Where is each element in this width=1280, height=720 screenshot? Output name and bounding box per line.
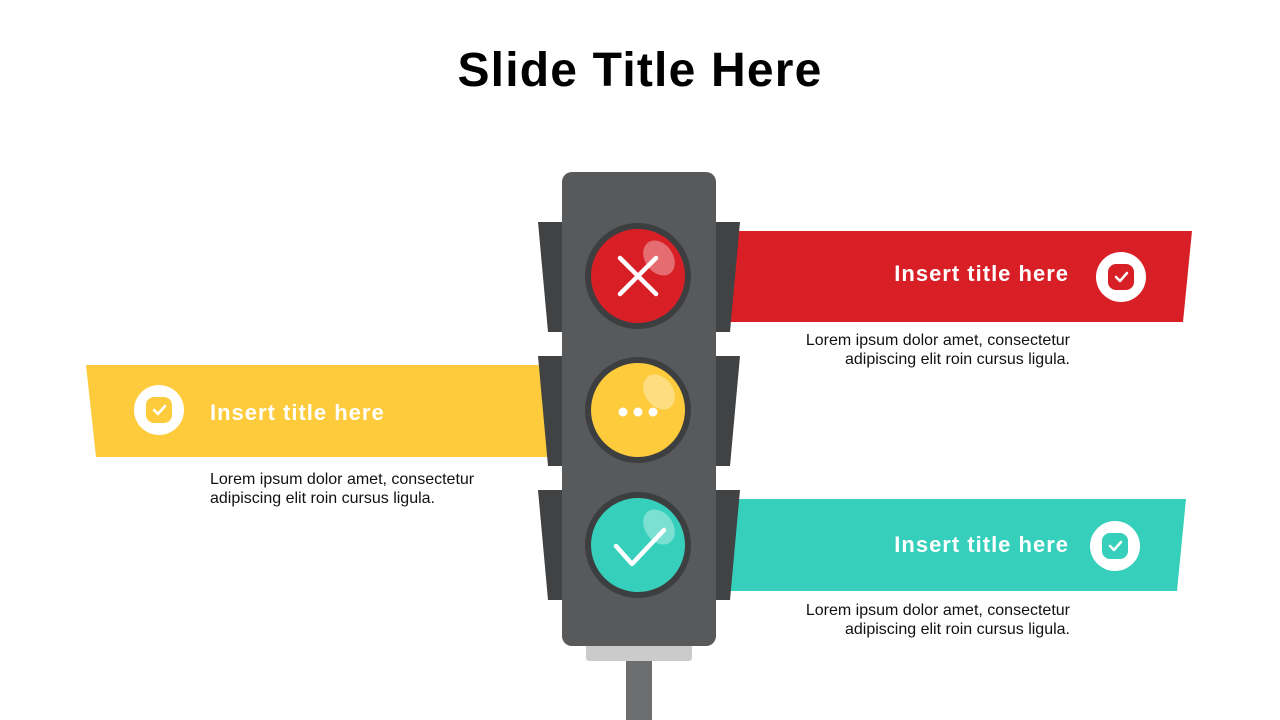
- light: yellow wait: [585, 357, 691, 463]
- light: red stop: [585, 223, 691, 329]
- banner: red: [720, 231, 1192, 322]
- text block: red description: Lorem ipsum dolor amet, consectetur: [806, 332, 1071, 349]
- title: Slide Title Here: [457, 44, 823, 97]
- text block: yellow description: Lorem ipsum dolor amet, consectetur: [210, 471, 475, 488]
- text block: yellow description: adipiscing elit roin cursus ligula.: [210, 490, 435, 507]
- yellow banner title: Insert title here: [210, 400, 385, 425]
- text block: green description: adipiscing elit roin cursus ligula.: [845, 621, 1070, 638]
- icon: red check badge: [1096, 252, 1146, 302]
- banner: green: [720, 499, 1186, 591]
- light: green go: [585, 492, 691, 598]
- banner: yellow: [86, 365, 560, 457]
- icon: yellow check badge: [134, 385, 184, 435]
- red banner title: Insert title here: [894, 261, 1069, 286]
- text block: green description: Lorem ipsum dolor amet, consectetur: [806, 602, 1071, 619]
- green banner title: Insert title here: [894, 532, 1069, 557]
- traffic light: [538, 172, 740, 720]
- icon: green check badge: [1090, 521, 1140, 571]
- text block: red description: adipiscing elit roin cursus ligula.: [845, 351, 1070, 368]
